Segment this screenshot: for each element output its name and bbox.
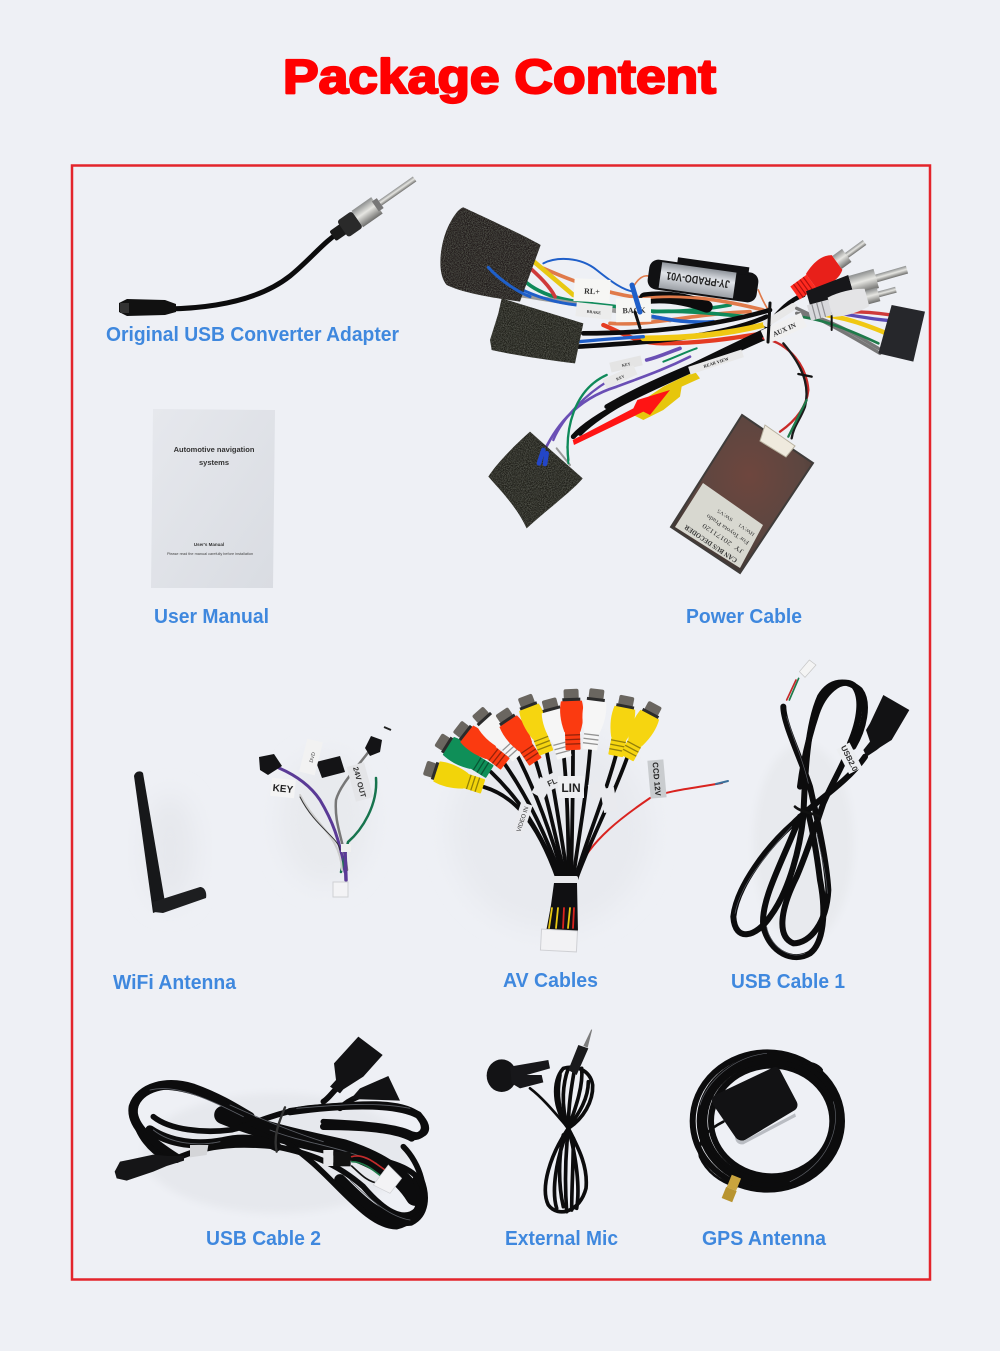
item: GPS antenna: [693, 1052, 842, 1202]
cable label: [190, 1145, 208, 1157]
clear wire tag: [347, 762, 373, 802]
decoder box CAN BUS: HW:V1 SW:V5: [716, 507, 756, 536]
label: USB Cable 1: USB Cable 1: [731, 971, 845, 993]
white connector: [333, 882, 348, 897]
fuse holder JY-PRADO-V01: [646, 254, 760, 304]
black RCA wires: [484, 748, 627, 880]
wires over foam: [488, 267, 570, 465]
wire tags: RL+: [584, 287, 600, 296]
wires: upper colored bundle: [488, 258, 768, 324]
wire tags: VIDEO IN: [517, 806, 530, 833]
label: AV Cables: AV Cables: [503, 970, 598, 992]
white wire tag top: DVD: [309, 751, 317, 763]
RCA plug: white: [806, 278, 899, 324]
item: user manual booklet: [151, 409, 275, 588]
item: user manual booklet: User's Manual: [194, 542, 224, 547]
item: user manual booklet: systems: [199, 458, 229, 467]
label: User Manual: User Manual: [154, 606, 269, 628]
harness wires and foam: [440, 207, 925, 528]
wire tags: KEY: [615, 373, 625, 382]
USB connector: [863, 695, 909, 757]
item: user manual booklet: Automotive navigation: [174, 445, 255, 454]
wire tags: FL: [546, 776, 559, 789]
wire tags: [573, 278, 807, 389]
label: USB Cable 2: USB Cable 2: [206, 1228, 321, 1250]
3.5mm jack: [568, 1045, 588, 1075]
connector: black plug right: [878, 305, 925, 362]
receiver puck: [712, 1067, 797, 1141]
white wire tag top: [299, 739, 323, 775]
connector: black plug center: [316, 756, 345, 778]
bundle strap: [553, 876, 578, 883]
KEY tag: [270, 778, 296, 798]
RCA plug: red: [787, 232, 872, 304]
item: USB cable 1: [733, 660, 909, 957]
USB2.0 tag: USB2.0: [839, 744, 860, 773]
label: WiFi Antenna: WiFi Antenna: [113, 972, 237, 994]
panel: package contents frame: [72, 166, 930, 1280]
label: External Mic: External Mic: [505, 1228, 618, 1250]
wires: right connector bundle: [797, 308, 892, 353]
item: user manual booklet: Please read the manual carefully before installation: [167, 552, 253, 556]
coil: [693, 1052, 842, 1190]
wire tags: KEY: [621, 361, 631, 368]
wires: black and yellow main trunk: [542, 295, 803, 460]
item: USB converter adapter cable: [119, 171, 420, 316]
coil: [530, 1067, 593, 1212]
connector: black plug upper right: [365, 736, 382, 756]
item: AV cables: [421, 688, 728, 952]
USB connector B: [351, 1076, 400, 1101]
wires: red and black to decoder: [763, 338, 812, 438]
cable ties: [632, 285, 770, 342]
item: external mic: [487, 1030, 593, 1212]
white connector: [540, 929, 577, 952]
foam sleeve 1: [440, 207, 541, 302]
connector: black plug left: [259, 754, 282, 775]
wire tags: REAR VIEW: [703, 356, 730, 369]
RCA plug: black: [805, 259, 910, 309]
mic head: [487, 1059, 517, 1092]
label: Power Cable: Power Cable: [686, 606, 802, 628]
audio jack: [115, 1155, 184, 1181]
fuse holder JY-PRADO-V01: JY-PRADO-V01: [666, 269, 731, 290]
KEY tag: KEY: [272, 783, 294, 796]
small white plug: [799, 660, 816, 677]
USB connector A: [330, 1037, 383, 1093]
wire tags: LIN: [561, 781, 581, 795]
wire tags: BRAKE: [587, 309, 602, 315]
CCD tag: [647, 759, 667, 799]
decoder box CAN BUS: [671, 415, 813, 573]
coil mass underlay: [133, 1085, 424, 1220]
label: GPS Antenna: GPS Antenna: [702, 1228, 827, 1250]
wire tags: BACK: [622, 306, 646, 315]
wire tags: AUX IN: [771, 321, 797, 339]
small white connector with wires: [323, 1150, 402, 1193]
wire tags: [511, 771, 618, 836]
RCA sockets: [421, 688, 666, 798]
foam sleeve 3: [488, 432, 583, 528]
clear wire tag: 24V OUT: [351, 766, 368, 799]
item: power cable harness: [440, 207, 925, 573]
coil: [733, 682, 865, 957]
item: key wire harness: [259, 727, 391, 897]
item: WiFi antenna: [134, 771, 206, 913]
item: USB cable 2: [115, 1037, 426, 1227]
RCA plug: yellow: [633, 372, 700, 420]
gold SMA connector: [722, 1174, 742, 1202]
CCD tag: CCD 12V: [651, 762, 663, 797]
clip: [510, 1060, 550, 1088]
label: Original USB Converter Adapter: Original USB Converter Adapter: [106, 324, 399, 346]
decoder box CAN BUS: JY 20171120: [701, 522, 745, 554]
foam sleeve 2: [490, 298, 583, 363]
title: Package Content: [283, 51, 716, 104]
decoder box CAN BUS: For Toyota Prado: [706, 512, 751, 545]
decoder box CAN BUS: CAN BUS DECODER: [682, 523, 739, 564]
coil: [135, 1087, 426, 1227]
red CCD wire: [577, 783, 722, 872]
red arrow: [573, 390, 670, 445]
